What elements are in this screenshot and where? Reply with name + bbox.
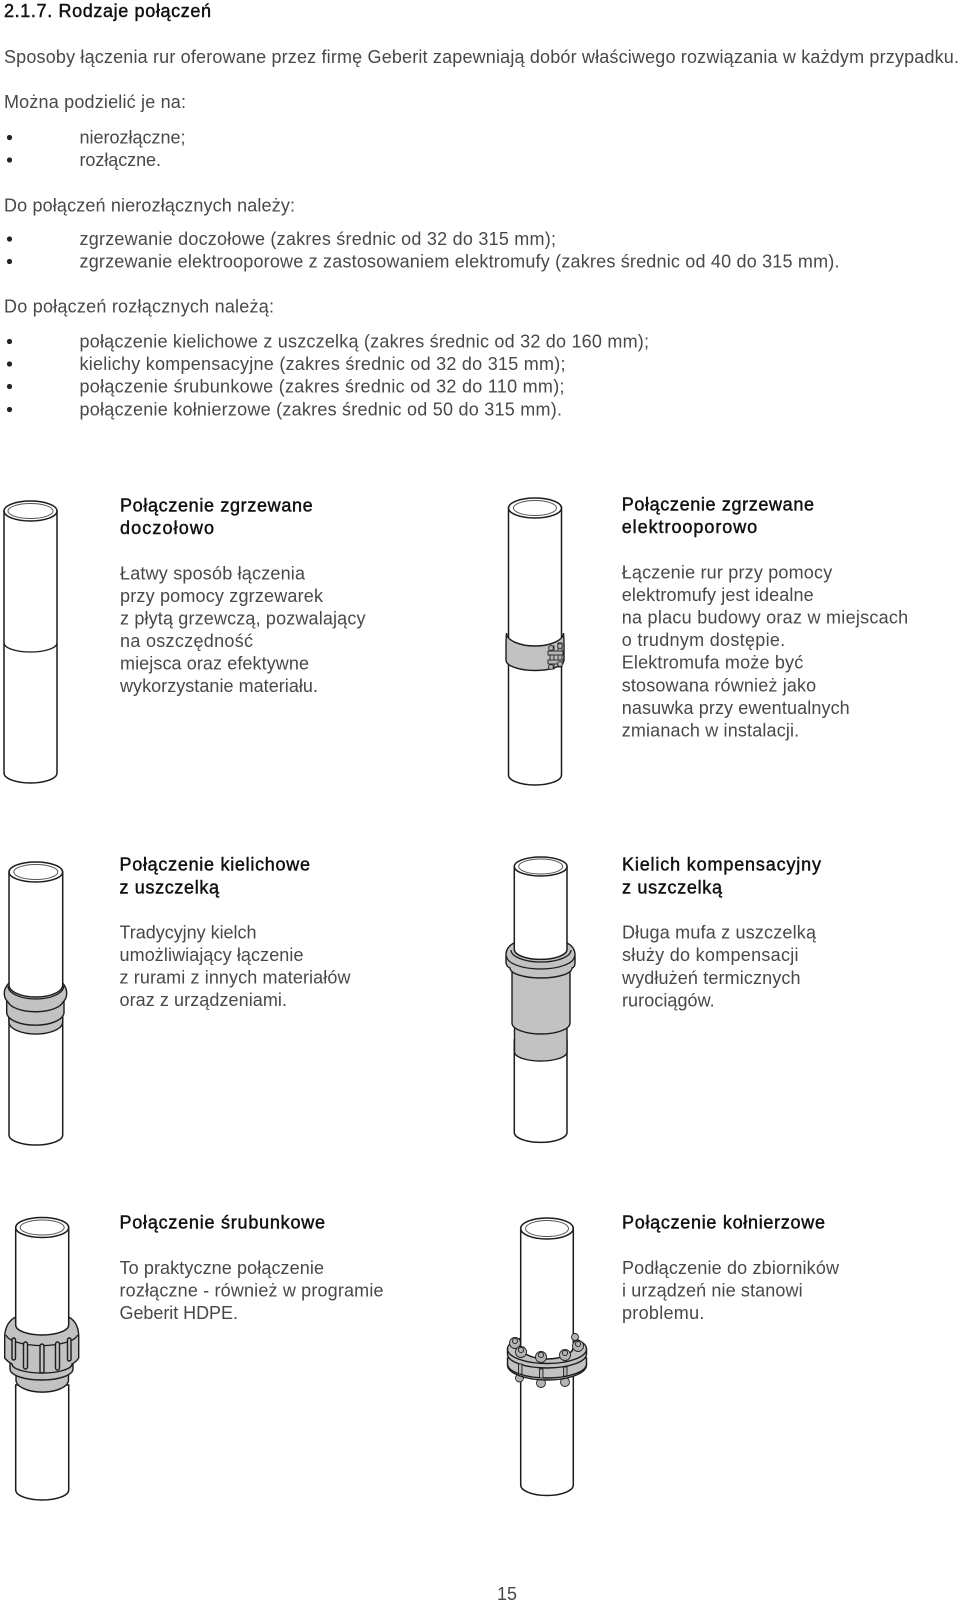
text: butt welding: doczołowo	[120, 518, 214, 538]
pipe: compensation socket	[506, 857, 575, 1142]
text: flange: Podłączenie do zbiorników	[622, 1258, 840, 1278]
permanent connections lead-in: Do połączeń nierozłącznych należy:	[4, 195, 295, 215]
list: connection kinds: nierozłączne;	[80, 127, 186, 147]
text: butt welding: wykorzystanie materiału.	[119, 676, 318, 696]
text: socket with seal: z uszczelką	[120, 877, 220, 897]
text: electrofusion: elektromufy jest idealne	[622, 585, 814, 605]
text: compensation socket: Kielich kompensacyjny	[622, 855, 821, 875]
list: detachable connections: połączenie kołnierzowe (zakres średnic od 50 do 315 mm).	[80, 400, 562, 420]
list: detachable connections: kielichy kompensacyjne (zakres średnic od 32 do 315 mm);	[80, 354, 566, 374]
text: electrofusion: zmianach w instalacji.	[622, 720, 799, 740]
list: permanent connections: zgrzewanie doczołowe (zakres średnic od 32 do 315 mm);	[80, 229, 556, 249]
text: compensation socket: rurociągów.	[622, 990, 715, 1010]
detachable connections lead-in: Do połączeń rozłącznych należą:	[4, 297, 274, 317]
pipe: butt welded	[4, 501, 57, 783]
text: socket with seal: Połączenie kielichowe	[120, 855, 310, 875]
text: electrofusion: nasuwka przy ewentualnych	[622, 698, 850, 718]
text: compensation socket: z uszczelką	[622, 877, 723, 897]
text: socket with seal: Tradycyjny kielch	[120, 922, 256, 942]
list: connection kinds: rozłączne.	[80, 150, 161, 170]
text: electrofusion: elektrooporowo	[622, 517, 757, 537]
electrofusion clamp	[548, 643, 563, 669]
text: butt welding: na oszczędność	[120, 631, 253, 651]
pipe: threaded union	[5, 1218, 79, 1500]
text: electrofusion: na placu budowy oraz w miejscach	[622, 608, 908, 628]
text: threaded union: Geberit HDPE.	[120, 1303, 238, 1323]
text: butt welding: Połączenie zgrzewane	[120, 496, 313, 516]
text: socket with seal	[120, 855, 352, 1010]
text: butt welding: przy pomocy zgrzewarek	[120, 586, 324, 606]
list: detachable connections: połączenie śrubunkowe (zakres średnic od 32 do 110 mm);	[80, 376, 564, 396]
text: butt welding: z płytą grzewczą, pozwalający	[120, 608, 366, 628]
text: threaded union: rozłączne - również w programie	[120, 1281, 384, 1301]
text: socket with seal: z rurami z innych materiałów	[120, 968, 352, 988]
text: flange	[622, 1212, 840, 1323]
pipe: socket with seal	[4, 862, 67, 1145]
list: permanent connections	[7, 229, 839, 272]
text: threaded union	[120, 1212, 384, 1323]
division lead-in: Można podzielić je na:	[4, 92, 186, 112]
list: connection kinds	[7, 127, 186, 170]
text: flange: Połączenie kołnierzowe	[622, 1212, 825, 1232]
text: socket with seal: oraz z urządzeniami.	[120, 990, 287, 1010]
pipe: electrofusion	[506, 498, 564, 785]
union nut ribs	[12, 1338, 71, 1373]
lower flange	[508, 1350, 586, 1388]
text: electrofusion: Elektromufa może być	[622, 653, 803, 673]
text: electrofusion: o trudnym dostępie.	[622, 630, 785, 650]
list: detachable connections: połączenie kielichowe z uszczelką (zakres średnic od 32 do 160 mm);	[80, 332, 649, 352]
text: electrofusion: stosowana również jako	[622, 675, 816, 695]
list: permanent connections: zgrzewanie elektrooporowe z zastosowaniem elektromufy (zakres średnic od 40 do 315 mm).	[80, 252, 840, 272]
title: 2.1.7. Rodzaje połączeń	[4, 1, 211, 21]
text: threaded union: To praktyczne połączenie	[120, 1258, 324, 1278]
text: flange: i urządzeń nie stanowi	[622, 1281, 803, 1301]
text: compensation socket: Długa mufa z uszczelką	[622, 923, 817, 943]
text: threaded union: Połączenie śrubunkowe	[120, 1212, 325, 1232]
flange bolts	[510, 1334, 584, 1362]
text: butt welding: miejsca oraz efektywne	[120, 653, 309, 673]
text: compensation socket: wydłużeń termicznych	[621, 968, 800, 988]
text: electrofusion: Łączenie rur przy pomocy	[622, 562, 832, 582]
list: detachable connections	[7, 332, 649, 420]
upper flange	[508, 1334, 586, 1378]
pipe: flange	[508, 1218, 586, 1496]
intro paragraph: Sposoby łączenia rur oferowane przez firmę Geberit zapewniają dobór właściwego rozwiązania w każdym przypadku.	[4, 47, 959, 67]
text: butt welding	[119, 496, 366, 696]
text: socket with seal: umożliwiający łączenie	[120, 945, 304, 965]
text: compensation socket: służy do kompensacji	[622, 945, 798, 965]
text: electrofusion: Połączenie zgrzewane	[622, 495, 814, 515]
text: compensation socket	[621, 855, 821, 1010]
text: flange: problemu.	[622, 1303, 704, 1323]
text: electrofusion	[622, 495, 908, 740]
text: butt welding: Łatwy sposób łączenia	[120, 563, 306, 583]
